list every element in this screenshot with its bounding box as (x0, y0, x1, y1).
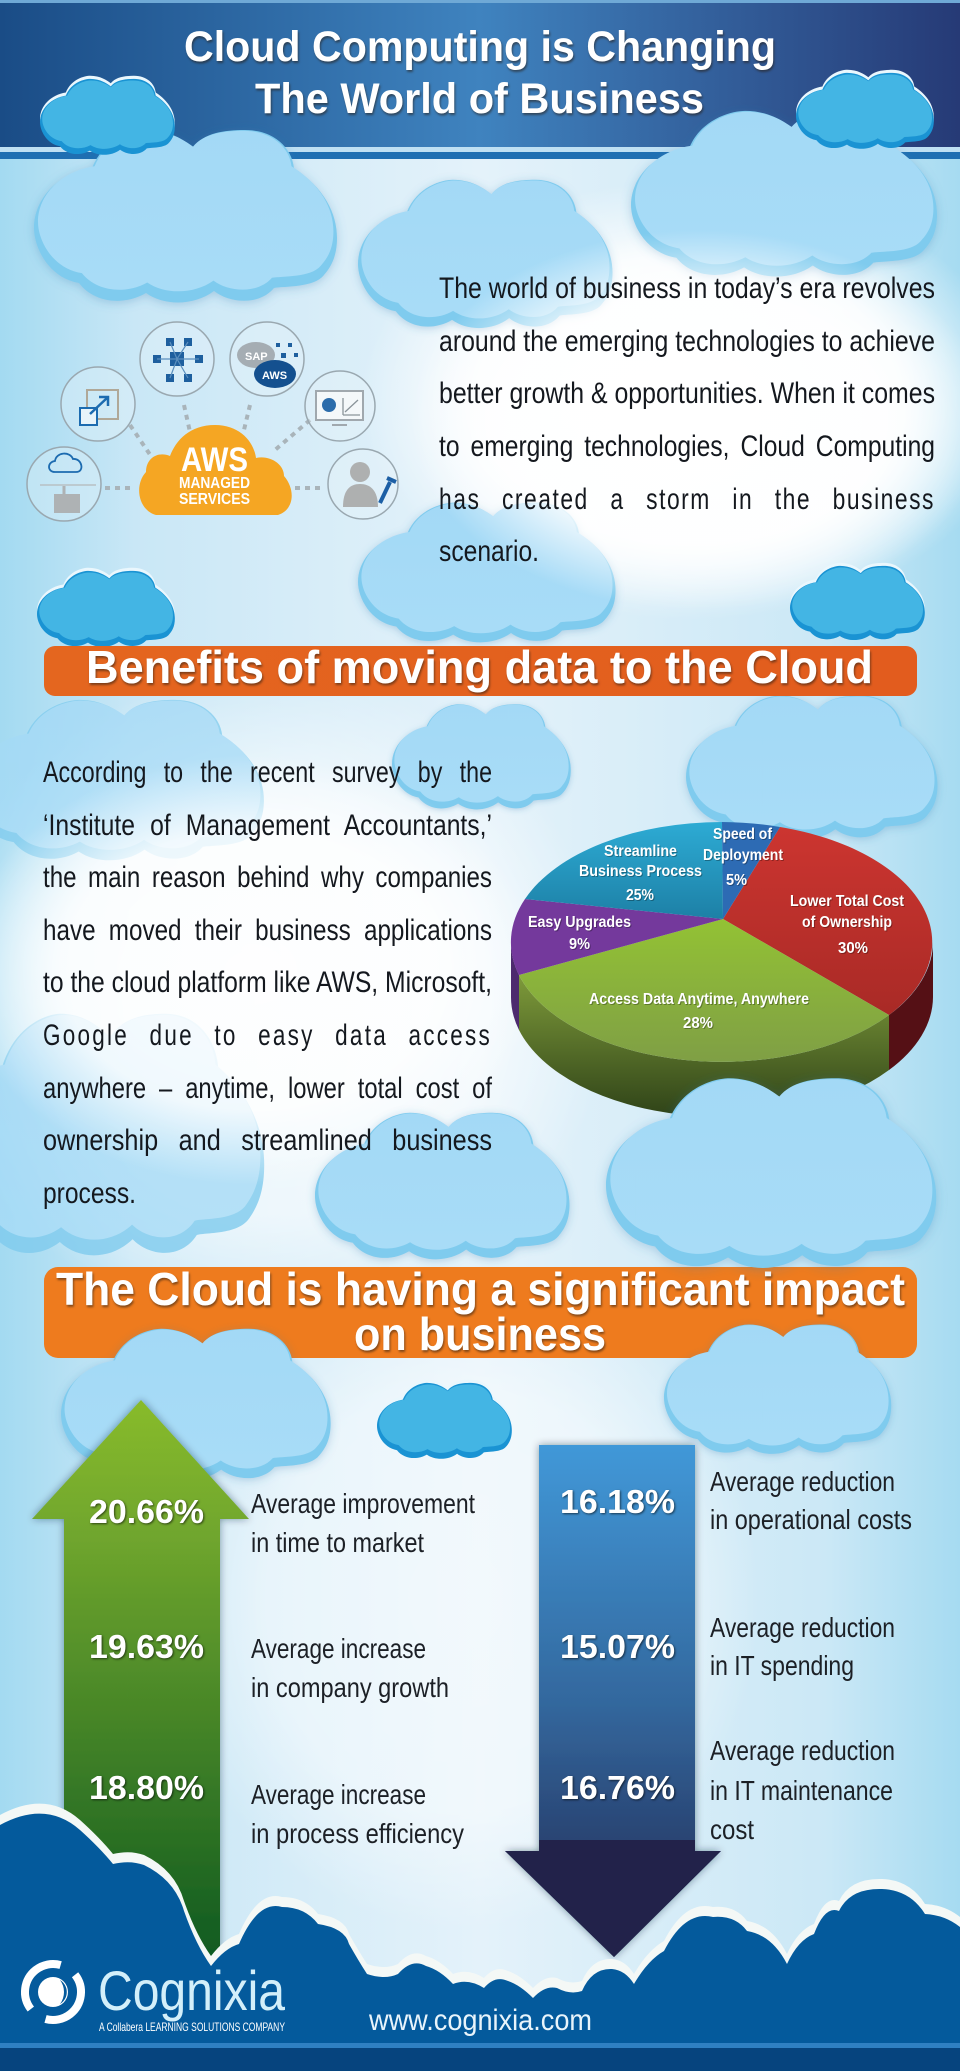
pie labels: 9% (569, 936, 590, 953)
stat column: reductions: 16.18% (560, 1483, 675, 1520)
small cloud: impact centre (377, 1380, 512, 1459)
arrow head shade (505, 1840, 721, 1957)
pie labels: Speed of (713, 826, 773, 843)
stat column: increases: in process efficiency (251, 1818, 464, 1849)
icon: network nodes (140, 322, 214, 396)
pie labels: Deployment (703, 847, 784, 864)
pie chart: benefits (511, 822, 933, 1117)
background cloud: section two left (0, 700, 264, 860)
pie labels: 28% (683, 1015, 713, 1032)
survey text block: process. (43, 1177, 136, 1210)
pie slice: lower total cost 30% (723, 827, 932, 1015)
AWS managed services diagram (27, 322, 398, 521)
survey text block: ownership and streamlined business (43, 1124, 492, 1157)
stat column: increases: Average increase (251, 1779, 426, 1810)
stat column: reductions: Average reduction (710, 1735, 895, 1766)
survey text block: anywhere – anytime, lower total cost of (43, 1072, 493, 1105)
blue down arrow (505, 1445, 721, 1957)
stat column: increases: Average increase (251, 1633, 426, 1664)
pie labels: Streamline (604, 843, 677, 860)
icon: person with wrench (328, 449, 398, 519)
icon: SAP on AWS: AWS (262, 370, 287, 382)
icon: expand arrow (61, 367, 135, 441)
small cloud: section right (790, 563, 925, 640)
background cloud: lower left (0, 1014, 264, 1255)
header band (0, 0, 960, 159)
stat column: increases (89, 1488, 475, 1849)
stat column: reductions: cost (710, 1814, 754, 1845)
intro text block: scenario. (439, 535, 539, 568)
background cloud: impact left (61, 1329, 331, 1480)
background cloud: mid centre (358, 503, 616, 642)
pie labels: Easy Upgrades (528, 914, 631, 931)
stat column: reductions: Average reduction (710, 1612, 895, 1643)
stat column: increases: 19.63% (89, 1628, 204, 1665)
stat column: increases: 20.66% (89, 1493, 204, 1530)
small cloud: header left (40, 76, 175, 155)
survey text block: ‘Institute of Management Accountants,’ (43, 809, 492, 842)
logo: Cognixia: Cognixia (98, 1959, 286, 2022)
background cloud: section two centre (392, 704, 571, 809)
connector dashes (105, 405, 325, 488)
pie labels: 25% (626, 887, 654, 904)
survey text block: Google due to easy data access (43, 1019, 492, 1052)
background cloud: upper centre (358, 180, 613, 328)
stat column: reductions: in IT spending (710, 1650, 854, 1681)
orange AWS cloud: AWS (181, 441, 248, 479)
small cloud: header right (796, 70, 934, 149)
pie labels (528, 826, 905, 1032)
stat column: increases: Average improvement (251, 1488, 475, 1519)
stat column: reductions (560, 1466, 912, 1845)
stat column: reductions: in operational costs (710, 1504, 912, 1535)
survey text block: to the cloud platform like AWS, Microsoft, (43, 966, 492, 999)
title (184, 23, 776, 123)
title: The World of Business (255, 75, 704, 123)
survey text block: the main reason behind why companies (43, 861, 492, 894)
banner: impact heading: on business (354, 1308, 606, 1360)
stat column: reductions: Average reduction (710, 1466, 895, 1497)
banner: benefits heading: Benefits of moving data to the Cloud (86, 641, 873, 693)
stat column: reductions: 16.76% (560, 1769, 675, 1806)
background cloud: upper left (34, 130, 337, 303)
banner: impact heading (44, 1263, 917, 1360)
stat column: reductions: 15.07% (560, 1628, 675, 1665)
stat column: increases: 18.80% (89, 1769, 204, 1806)
pie slice: access data 28% (519, 919, 889, 1062)
stat column: reductions: in IT maintenance (710, 1775, 893, 1806)
icon: SAP on AWS: SAP (245, 351, 268, 363)
icon: presentation chart (305, 371, 375, 441)
icon: logo mark (14, 1953, 92, 2031)
orange AWS cloud: MANAGED (179, 475, 250, 492)
stat column: increases: in time to market (251, 1527, 424, 1558)
background cloud: upper right (631, 111, 937, 277)
pie labels: Lower Total Cost (790, 893, 905, 910)
white glow behind text: intro (410, 230, 960, 610)
intro text block (439, 272, 935, 568)
title: Cloud Computing is Changing (184, 23, 776, 71)
survey text block: According to the recent survey by the (43, 756, 492, 789)
background cloud: lower centre (315, 1113, 570, 1259)
banner: impact heading: The Cloud is having a significant impact (56, 1263, 905, 1315)
pie slice: speed of deployment 5% (722, 822, 780, 919)
orange AWS cloud (139, 425, 292, 515)
footer cloud band (0, 1804, 960, 2071)
green up arrow (32, 1400, 249, 1960)
pie labels: 5% (726, 872, 747, 889)
small cloud: section left (37, 568, 175, 647)
icon: cloud server (27, 447, 101, 521)
orange AWS cloud: SERVICES (179, 491, 250, 508)
survey text block (43, 756, 493, 1210)
pie slice: easy upgrades 9% (511, 899, 723, 975)
pie labels: of Ownership (802, 914, 892, 931)
pie labels: Business Process (579, 863, 702, 880)
logo: Cognixia: A Collabera LEARNING SOLUTIONS COMPANY (99, 2020, 285, 2034)
website url: www.cognixia.com (368, 2004, 592, 2037)
white glow behind text: survey (0, 755, 540, 1185)
pie labels: Access Data Anytime, Anywhere (589, 991, 809, 1008)
pie labels: 30% (838, 940, 868, 957)
background cloud: section two right (686, 696, 937, 839)
icon: SAP on AWS (230, 322, 304, 396)
background cloud: impact right (664, 1324, 891, 1454)
pie slice: streamline 25% (525, 822, 723, 919)
stat column: increases: in company growth (251, 1672, 449, 1703)
pie side walls (511, 942, 933, 1117)
logo: Cognixia (14, 1953, 286, 2034)
survey text block: have moved their business applications (43, 914, 492, 947)
background cloud: lower right (606, 1078, 936, 1268)
